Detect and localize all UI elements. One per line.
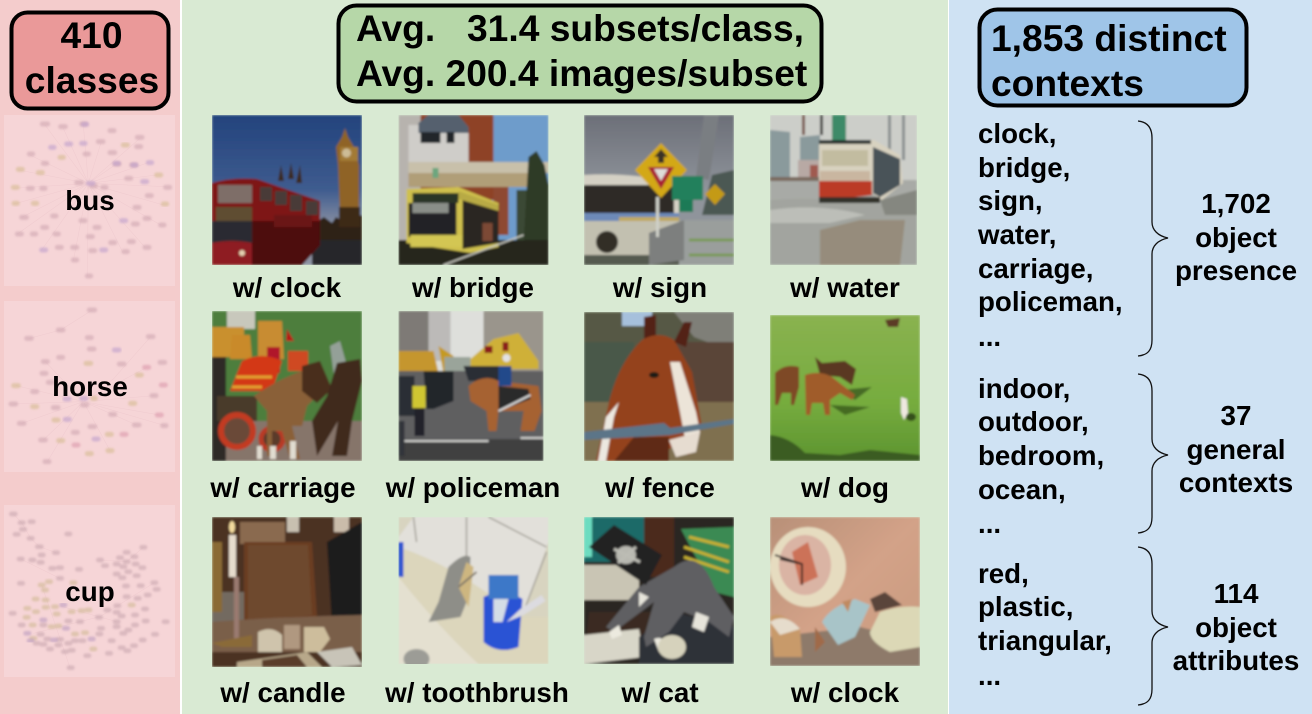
label: 37 general contexts: contexts: [1179, 467, 1293, 498]
list: object presence contexts: bridge,: [978, 152, 1070, 183]
caption: w/ toothbrush: w/ toothbrush: [384, 677, 569, 708]
label: 37 general contexts: 37: [1221, 400, 1251, 431]
heading: 410 classes: classes: [25, 59, 159, 101]
brace: object presence: [1138, 121, 1168, 356]
list: object presence contexts: [977, 118, 1123, 352]
heading: 1,853 distinct contexts: contexts: [991, 62, 1144, 104]
photo: cat with skull can: [584, 517, 734, 664]
photo: horse carriage: [212, 311, 362, 461]
photo: road signs and transit bus: [584, 115, 734, 265]
brace: general contexts: [1138, 374, 1168, 533]
list: general contexts: ...: [978, 508, 1001, 539]
label: 37 general contexts: general: [1187, 434, 1285, 465]
list: general contexts: ocean,: [978, 474, 1066, 505]
label: 37 general contexts: [1179, 400, 1293, 498]
panel: classes: [0, 0, 180, 714]
list: object attributes: ...: [978, 660, 1001, 691]
list: object presence contexts: ...: [978, 321, 1001, 352]
heading: 410 classes: [12, 12, 168, 108]
label: 1,702 object presence: object: [1195, 222, 1277, 253]
caption: w/ dog: w/ dog: [800, 472, 889, 503]
heading: 1,853 distinct contexts: 1,853 distinct: [991, 17, 1227, 59]
list: object presence contexts: policeman,: [978, 286, 1123, 317]
list: general contexts: bedroom,: [978, 440, 1104, 471]
label: 1,702 object presence: [1175, 188, 1297, 286]
brace: object attributes: [1138, 547, 1168, 705]
label: 114 object attributes: object: [1195, 612, 1277, 643]
list: object presence contexts: carriage,: [978, 253, 1093, 284]
label: 114 object attributes: [1173, 578, 1299, 676]
photo: guinea pig and clock painting: [770, 517, 920, 666]
caption: w/ candle: w/ candle: [219, 677, 346, 708]
photo: mounted police: [398, 311, 544, 461]
list: object presence contexts: sign,: [978, 185, 1043, 216]
list: object attributes: [978, 558, 1112, 691]
heading: averages: 31.4 subsets/class,: [467, 7, 804, 49]
caption: w/ bridge: w/ bridge: [411, 272, 534, 303]
photo: horse at fence: [584, 312, 734, 461]
panel: contexts: [949, 0, 1312, 714]
network graph: horse: [4, 301, 175, 472]
photo: horses and dog in field: [770, 315, 920, 461]
list: general contexts: outdoor,: [978, 406, 1089, 437]
network graph: cup: cup: [65, 576, 115, 607]
list: object presence contexts: clock,: [978, 118, 1056, 149]
list: general contexts: [978, 373, 1104, 539]
caption: w/ carriage: w/ carriage: [209, 472, 356, 503]
network graph: bus: bus: [65, 185, 115, 216]
caption: w/ clock (cup row): w/ clock: [790, 677, 900, 708]
caption: w/ sign: w/ sign: [612, 272, 707, 303]
photo: bus with clock tower: [212, 115, 362, 265]
list: object attributes: triangular,: [978, 625, 1112, 656]
heading: averages: [338, 6, 822, 102]
list: object attributes: plastic,: [978, 591, 1073, 622]
list: object attributes: red,: [978, 558, 1029, 589]
photo: candle and teacups: [212, 517, 362, 667]
label: 1,702 object presence: presence: [1175, 255, 1297, 286]
label: 1,702 object presence: 1,702: [1201, 188, 1271, 219]
heading: averages: Avg. 200.4 images/subset: [356, 52, 807, 94]
list: object presence contexts: water,: [977, 219, 1056, 250]
list: general contexts: indoor,: [978, 373, 1070, 404]
label: 114 object attributes: attributes: [1173, 645, 1299, 676]
photo: yellow bus under bridge: [398, 115, 548, 265]
panel: subsets: [182, 0, 948, 714]
network graph: horse: horse: [52, 371, 128, 402]
caption: w/ water: w/ water: [789, 272, 900, 303]
caption: w/ cat: w/ cat: [620, 677, 699, 708]
caption: w/ policeman: w/ policeman: [385, 472, 560, 503]
heading: averages: Avg.: [356, 7, 435, 49]
photo: bus in flooded road: [770, 115, 917, 265]
heading: 410 classes: 410: [60, 14, 123, 56]
network graph: bus: [4, 115, 175, 286]
photo: toothbrush in blue cup: [398, 517, 548, 664]
heading: 1,853 distinct contexts: [980, 10, 1246, 106]
label: 114 object attributes: 114: [1214, 578, 1259, 609]
caption: w/ fence: w/ fence: [604, 472, 715, 503]
caption: w/ clock: w/ clock: [232, 272, 342, 303]
network graph: cup: [4, 505, 175, 677]
